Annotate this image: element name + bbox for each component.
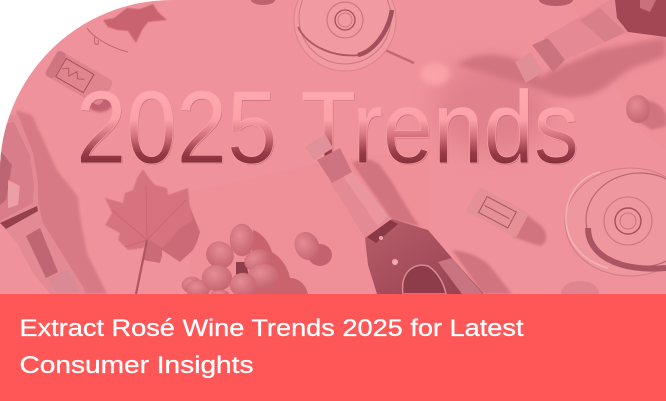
icon: top left cork — [44, 50, 114, 112]
photo background — [0, 0, 666, 305]
soft shadows — [16, 37, 666, 294]
icon: right wine glass — [565, 168, 666, 276]
caption bar — [0, 294, 666, 401]
icon: loose grape top right — [539, 0, 573, 6]
icon: top wine glass — [294, 0, 396, 71]
icon: centre vine leaf — [105, 169, 200, 294]
icon: grapes — [182, 224, 308, 298]
icon: loose grape bottom — [561, 281, 599, 294]
caption text — [20, 315, 524, 379]
caption text: Extract Rosé Wine Trends 2025 for Latest — [20, 315, 524, 342]
icon: left bottle — [0, 115, 86, 294]
icon: right cork — [466, 186, 529, 238]
caption text: Consumer Insights — [20, 352, 254, 379]
icon: loose grape centre — [294, 232, 332, 266]
icon: loose grape top centre — [251, 0, 275, 5]
icon: top right bottle — [515, 0, 666, 83]
title: 2025 Trends: 2025 Trends — [77, 71, 580, 186]
title: 2025 Trends — [80, 88, 576, 165]
icon: top left vine leaf — [87, 4, 167, 52]
icon: centre bottle — [305, 134, 483, 294]
title: 2025 Trends: 2025 Trends — [76, 70, 579, 185]
icon: loose grape right — [626, 95, 650, 123]
highlight — [420, 63, 450, 85]
